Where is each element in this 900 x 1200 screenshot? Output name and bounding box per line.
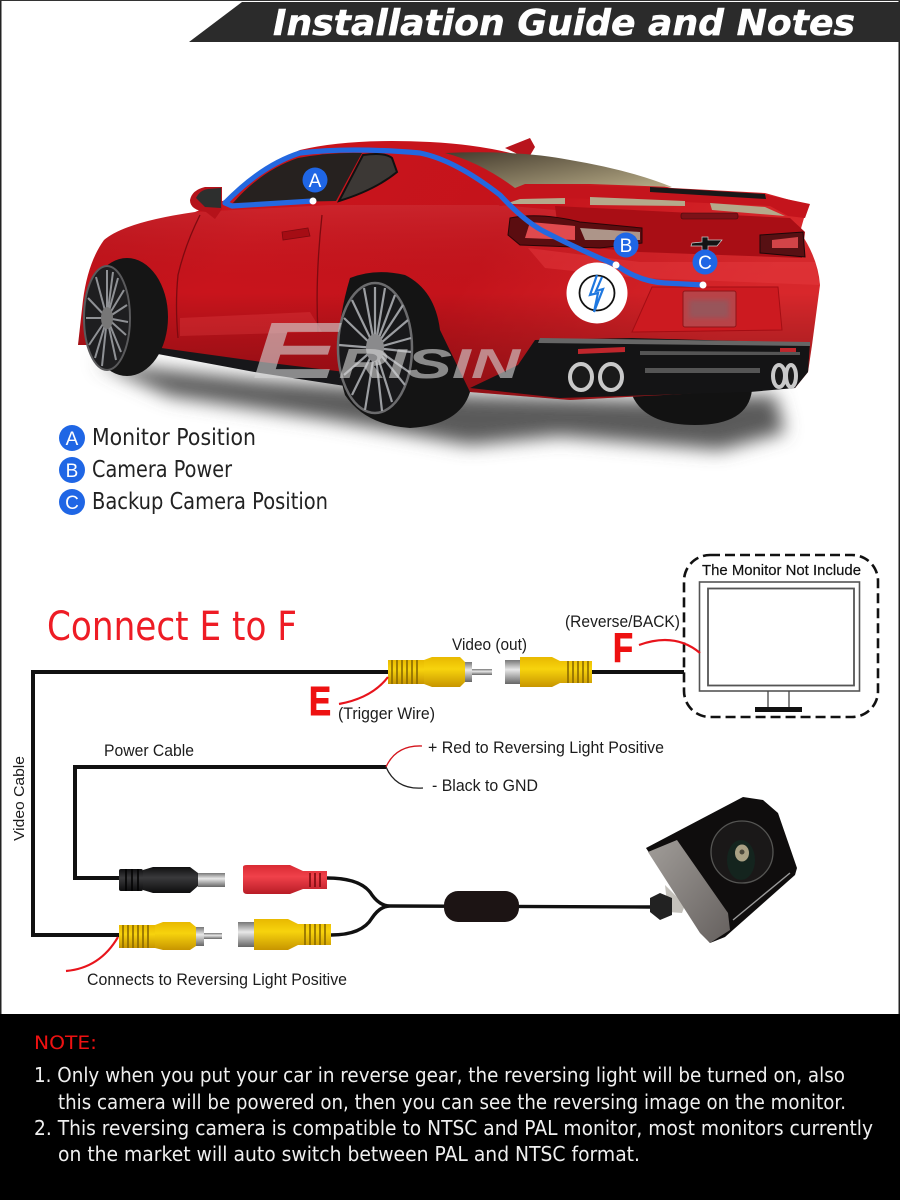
connects label: Connects to Reversing Light Positive bbox=[87, 971, 347, 989]
side windows bbox=[233, 153, 362, 203]
F trigger wire bbox=[639, 640, 700, 653]
legend bbox=[59, 425, 328, 515]
label E: E bbox=[309, 678, 331, 724]
monitor frame bbox=[700, 582, 860, 691]
car body bbox=[78, 141, 820, 400]
chevrolet bowtie bbox=[691, 237, 722, 250]
monitor cable line bbox=[590, 670, 684, 674]
note 2 line 2: on the market will auto switch between PAL and NTSC format. bbox=[58, 1142, 640, 1166]
rear bumper diffuser bbox=[470, 338, 810, 398]
route line bbox=[225, 150, 703, 285]
marker B bbox=[612, 232, 638, 268]
ground shadow bbox=[95, 362, 785, 450]
title banner bbox=[189, 2, 900, 44]
marker B: B bbox=[620, 236, 632, 257]
camera mount nut bbox=[665, 885, 685, 913]
heading: connect E to F: Connect E to F bbox=[47, 604, 297, 650]
icon: power lightning bbox=[566, 262, 628, 324]
left tail light bbox=[508, 216, 642, 248]
trigger wire label: (Trigger Wire) bbox=[338, 705, 435, 723]
monitor callout bbox=[684, 555, 878, 717]
marker C bbox=[692, 250, 718, 288]
note 1 line 1: 1. Only when you put your car in reverse gear, the reversing light will be turned on, also bbox=[34, 1063, 845, 1087]
third brake light bbox=[681, 213, 738, 219]
reverse back label: (Reverse/BACK) bbox=[565, 613, 680, 631]
body shading bbox=[78, 205, 820, 400]
side mirror bbox=[190, 187, 222, 219]
far rear wheel bbox=[632, 390, 752, 425]
yellow male RCA plug top bbox=[388, 657, 492, 687]
license plate recess bbox=[632, 287, 782, 332]
antenna bbox=[505, 138, 535, 159]
side sill bbox=[147, 346, 345, 386]
door highlight bbox=[180, 312, 322, 336]
Y-split camera cable bbox=[327, 878, 650, 935]
camera edge highlight bbox=[733, 873, 790, 920]
rear bumper highlight band bbox=[528, 248, 820, 285]
camera silver side bbox=[648, 840, 730, 943]
exhaust tips bbox=[570, 364, 796, 390]
video cable line bbox=[33, 672, 390, 935]
yellow female RCA plug top bbox=[505, 657, 592, 687]
rear glass bbox=[445, 152, 672, 188]
inline filter box bbox=[444, 891, 519, 922]
wiring diagram bbox=[12, 555, 878, 989]
connects label wire bbox=[66, 937, 118, 971]
black DC plug bbox=[119, 867, 225, 893]
license plate bbox=[683, 291, 736, 327]
marker A bbox=[302, 168, 328, 204]
rear wheel bbox=[338, 272, 470, 428]
trunk lid bbox=[555, 206, 805, 258]
label F: F bbox=[613, 625, 633, 671]
camera mount bbox=[650, 893, 672, 920]
legend item B: Camera Power bbox=[92, 457, 232, 483]
yellow female RCA plug bottom bbox=[238, 919, 331, 950]
yellow male RCA plug bottom bbox=[119, 922, 222, 950]
E trigger wire bbox=[339, 677, 388, 704]
red socket bbox=[243, 865, 327, 894]
right tail light bbox=[760, 232, 805, 257]
marker C: C bbox=[698, 253, 712, 274]
car illustration bbox=[78, 138, 820, 450]
legend item A: Monitor Position bbox=[92, 425, 256, 451]
door handle bbox=[282, 228, 310, 240]
power cable line bbox=[75, 767, 386, 878]
spoiler bbox=[489, 185, 810, 218]
camera housing bbox=[646, 797, 797, 943]
notes panel bbox=[0, 1014, 900, 1200]
marker A: A bbox=[309, 171, 322, 192]
legend item B: B bbox=[66, 461, 78, 482]
note heading: NOTE: bbox=[34, 1032, 97, 1054]
legend item A: A bbox=[66, 429, 79, 450]
title: Installation Guide and Notes bbox=[273, 3, 855, 44]
door lines bbox=[176, 215, 322, 338]
power cable label: Power Cable bbox=[104, 742, 194, 760]
black ground label: - Black to GND bbox=[432, 777, 538, 795]
monitor caption: The Monitor Not Include bbox=[702, 562, 861, 579]
monitor stand bbox=[768, 691, 789, 707]
legend item C: Backup Camera Position bbox=[92, 489, 328, 515]
front wheel bbox=[84, 258, 168, 376]
red positive label: + Red to Reversing Light Positive bbox=[428, 739, 664, 757]
backup camera bbox=[646, 797, 797, 943]
video out label: Video (out) bbox=[452, 636, 527, 654]
red positive branch bbox=[386, 746, 422, 767]
camera lens bbox=[711, 821, 773, 883]
watermark: E RISIN bbox=[252, 306, 523, 395]
legend item C: C bbox=[65, 493, 79, 514]
note 1 line 2: this camera will be powered on, then you can see the reversing image on the monitor. bbox=[58, 1090, 846, 1114]
black ground branch bbox=[386, 767, 423, 788]
video cable label: Video Cable bbox=[12, 756, 28, 841]
